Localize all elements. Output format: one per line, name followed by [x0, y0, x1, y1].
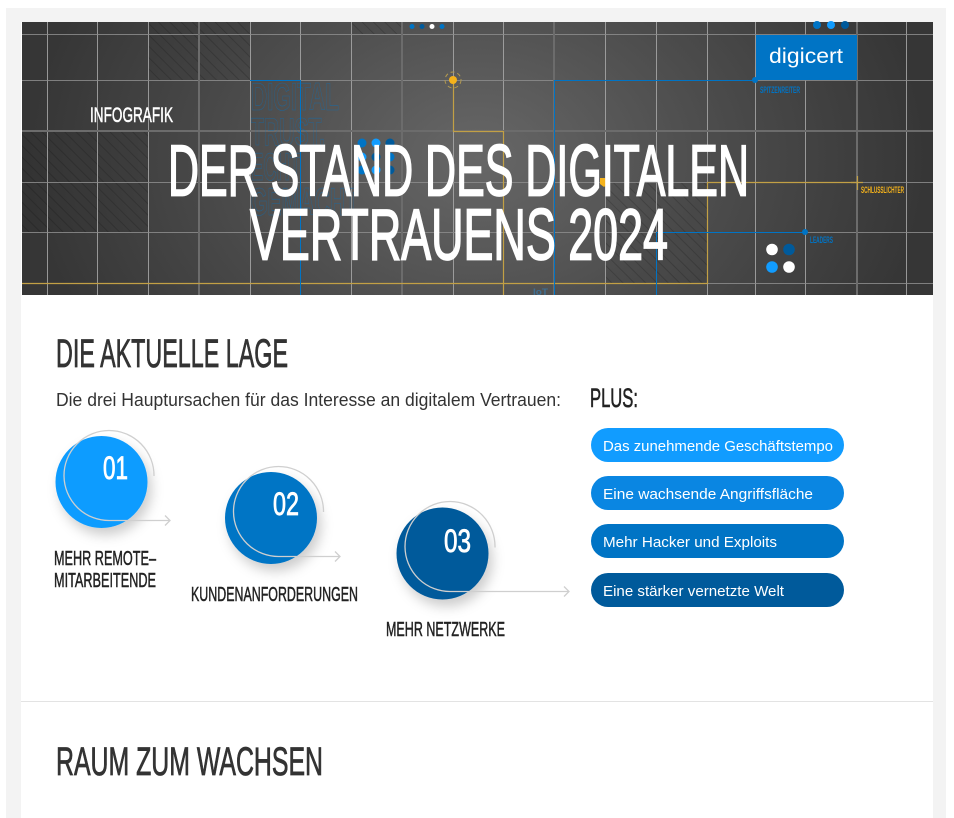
outline text: digital trust: TRUST.	[251, 111, 325, 154]
title: VERTRAUENS 2024	[250, 196, 668, 276]
heading: raum zum wachsen: RAUM ZUM WACHSEN	[56, 740, 323, 784]
icon: yellow marker	[600, 178, 608, 187]
step 01: MEHR REMOTE–	[54, 548, 157, 570]
icon: yellow target node	[445, 72, 461, 88]
outline text: digital trust: ECHT	[251, 146, 301, 189]
pill: vernetzte welt: Eine stärker vernetzte Welt	[603, 583, 785, 600]
dot cluster: bottom right	[766, 244, 795, 273]
step 03: 03	[444, 523, 471, 559]
step 01: 01	[103, 450, 128, 486]
title	[168, 132, 749, 276]
yellow connector lines	[22, 80, 857, 295]
pill: geschäftstempo	[591, 428, 844, 462]
heading: die aktuelle lage: DIE AKTUELLE LAGE	[56, 332, 288, 376]
dot cluster: top centre	[410, 24, 444, 29]
step 01	[54, 431, 170, 592]
pill: vernetzte welt	[591, 573, 844, 607]
dot cluster: top right	[813, 21, 849, 29]
heading: plus: PLUS:	[590, 383, 638, 413]
blue nodes	[752, 77, 808, 235]
outline text: iot: IoT	[533, 287, 549, 297]
step 03: MEHR NETZWERKE	[386, 619, 505, 641]
pill: hacker: Mehr Hacker und Exploits	[603, 534, 777, 551]
step 01: MITARBEITENDE	[54, 570, 156, 592]
logo: digicert	[756, 35, 857, 80]
dot cluster: middle	[358, 138, 394, 174]
pill: geschäftstempo: Das zunehmende Geschäftstempo	[603, 438, 833, 455]
outline text: digital trust	[251, 76, 358, 224]
label: spitzenreiter: SPITZENREITER	[760, 85, 800, 95]
step 02: 02	[273, 486, 299, 522]
outline text: digital trust: DIGITAL	[251, 76, 339, 119]
pill: angriffsfläche	[591, 476, 844, 510]
step 02: KUNDENANFORDERUNGEN	[191, 584, 358, 606]
label: schlusslichter: SCHLUSSLICHTER	[861, 185, 904, 195]
intro text: Die drei Hauptursachen für das Interesse an digitalem Vertrauen:	[56, 390, 561, 410]
pill: angriffsfläche: Eine wachsende Angriffsfläche	[603, 486, 813, 503]
logo: digicert: digicert	[769, 45, 843, 68]
label: leaders: LEADERS	[810, 235, 833, 245]
outline text: digital trust: GEMACHT	[251, 181, 358, 224]
step 03	[386, 502, 569, 641]
step 02	[191, 467, 358, 606]
pill: hacker	[591, 524, 844, 558]
eyebrow: infografik: INFOGRAFIK	[90, 104, 173, 127]
panel: header banner	[22, 21, 933, 297]
blue connector lines	[250, 80, 805, 295]
